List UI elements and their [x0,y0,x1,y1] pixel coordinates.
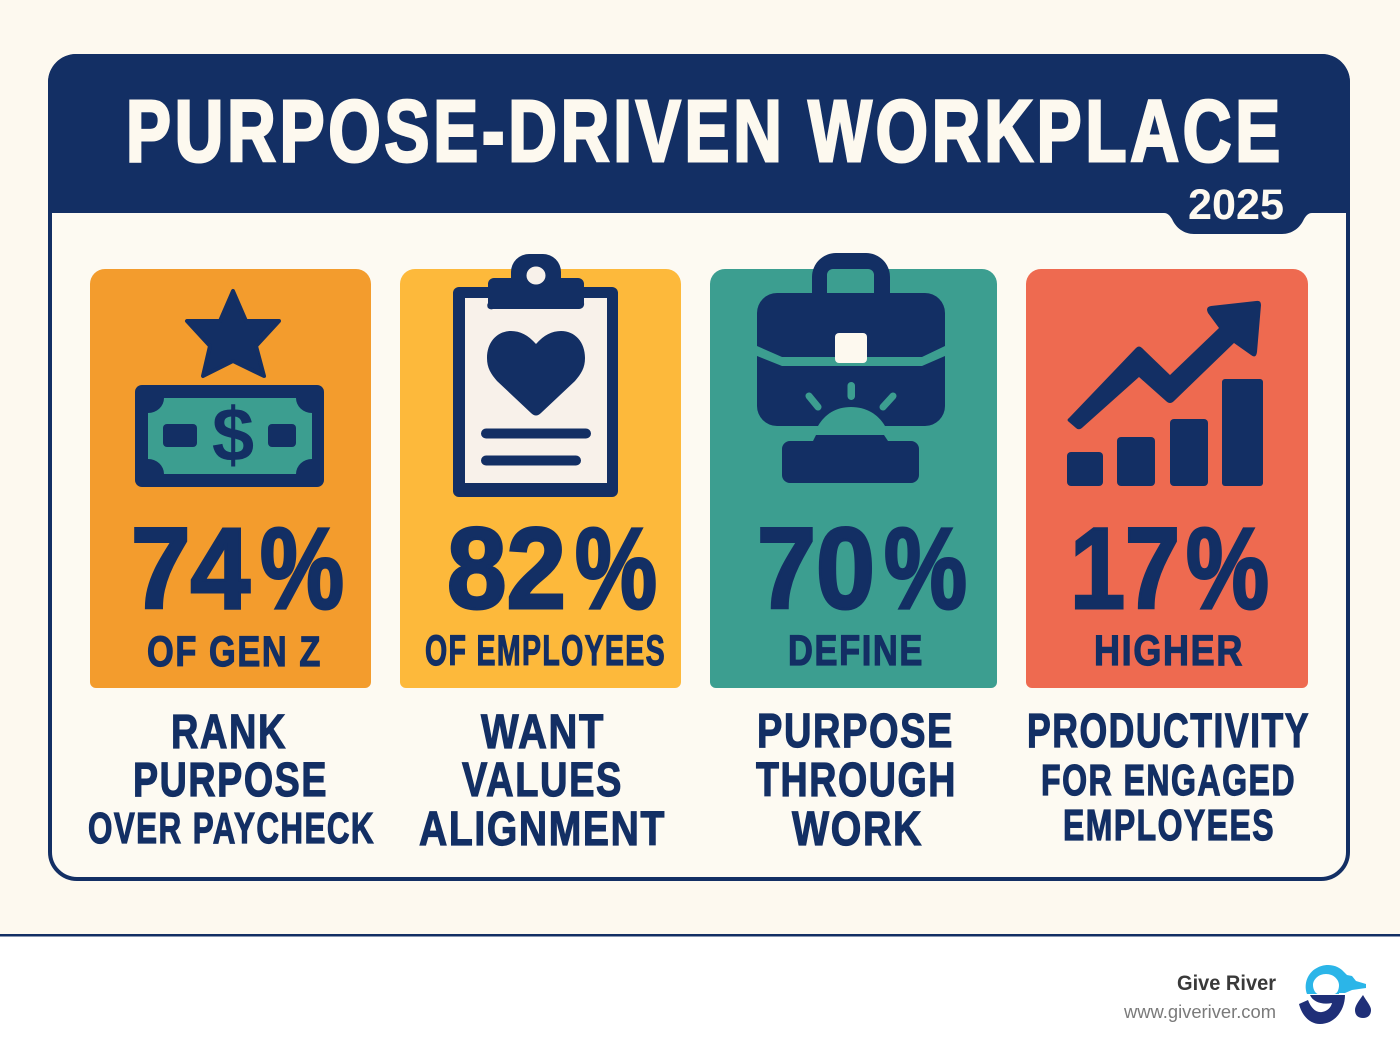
statistic: 70 [757,505,875,633]
caption: PRODUCTIVITY [1027,705,1310,758]
caption: PURPOSE [757,705,954,758]
caption [1027,705,1310,850]
statistic: % [1186,505,1269,633]
card background [1026,269,1308,688]
panel: Gen Z [88,269,375,853]
header banner [48,54,1350,234]
footer [0,937,1400,1052]
year badge: 2025 [1188,181,1284,229]
icon: rising chart arrow [1067,301,1263,486]
statistic [131,505,344,633]
caption: THROUGH [756,754,957,807]
brand name: Give River [1177,972,1276,995]
card background [710,269,997,688]
icon: briefcase with sunrise [757,253,945,483]
card label: OF EMPLOYEES [425,627,666,675]
caption: RANK [171,706,287,759]
caption: VALUES [462,754,623,807]
card background [90,269,371,688]
caption [419,706,666,856]
statistic: 74 [131,505,250,633]
panel: define purpose [710,253,997,856]
statistic [1070,505,1269,633]
statistic [447,505,657,633]
card label: OF GEN Z [147,628,322,676]
statistic [757,505,967,633]
website: www.giveriver.com [1123,1002,1276,1022]
caption: OVER PAYCHECK [88,804,375,853]
icon: star over banknote [135,291,324,487]
statistic: % [260,505,344,633]
icon: star over banknote: $ [212,393,254,478]
card label: DEFINE [788,627,924,675]
caption [88,706,375,853]
caption: PURPOSE [133,754,328,807]
statistic: % [884,505,967,633]
icon: Give River logo [1299,965,1371,1024]
statistic: 17 [1070,505,1180,633]
caption: FOR ENGAGED [1041,756,1296,805]
card label: HIGHER [1094,627,1244,675]
caption: WANT [481,706,605,759]
statistic: 82 [447,505,566,633]
frame panel [50,56,1348,879]
statistic: % [575,505,657,633]
card background [400,269,681,688]
caption [756,705,957,856]
caption: ALIGNMENT [419,803,666,856]
panel: employees [400,254,681,856]
icon: clipboard with heart [453,254,618,497]
caption: EMPLOYEES [1063,801,1275,850]
panel: productivity [1026,269,1310,850]
caption: WORK [792,803,923,856]
